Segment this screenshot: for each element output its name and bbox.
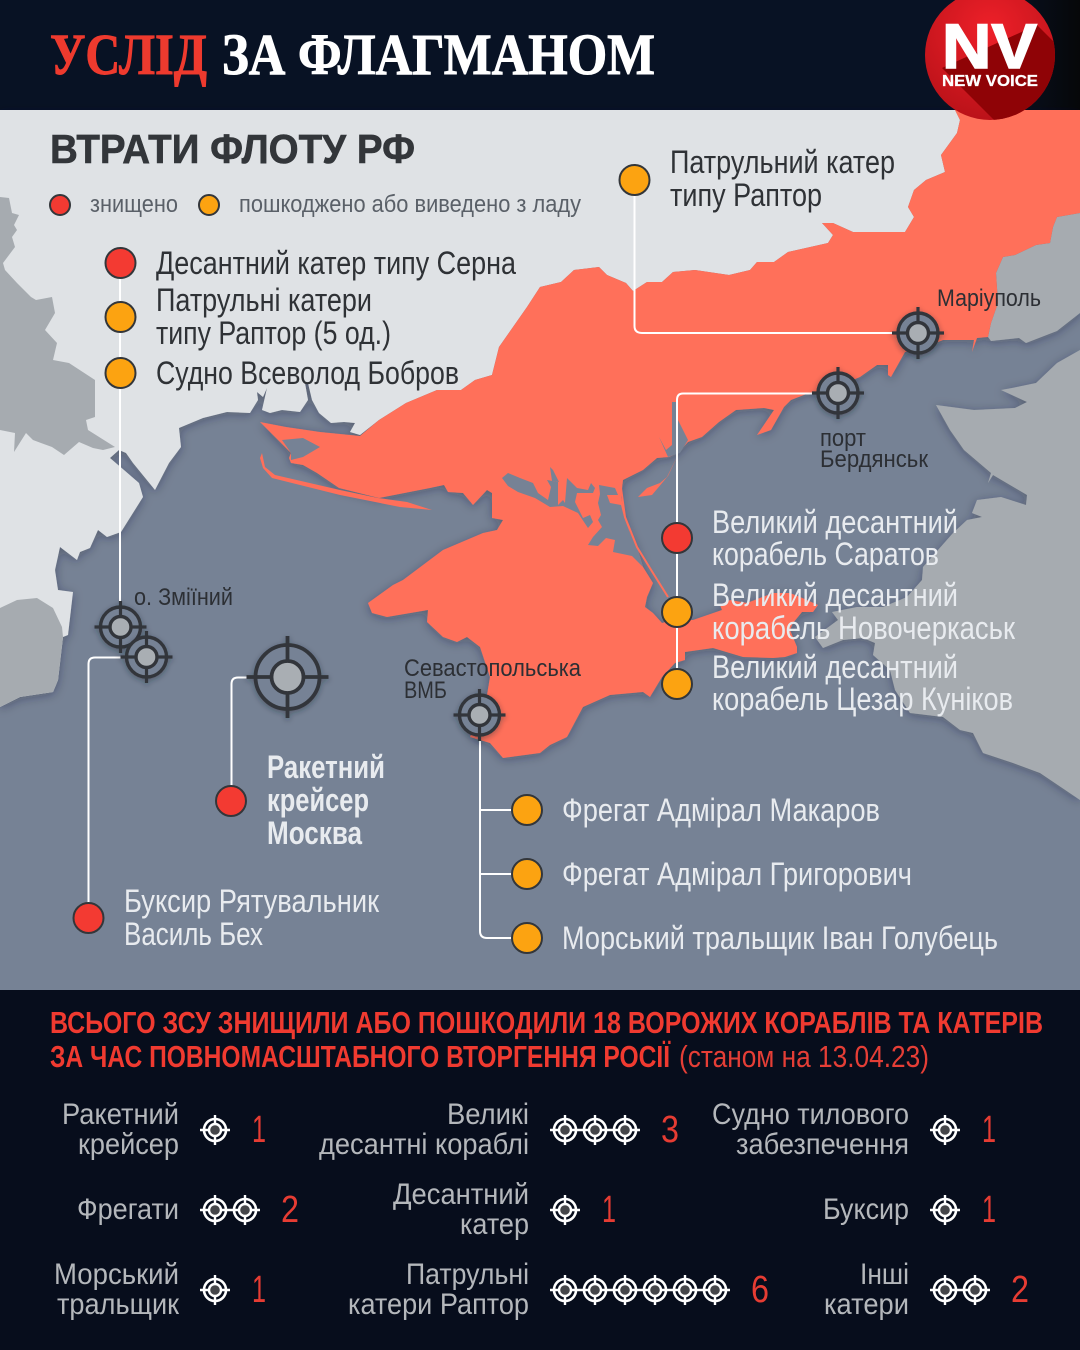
target: cruiser Moskva — [246, 636, 328, 718]
marker: Moskva — [216, 786, 246, 816]
title: УСЛІД — [50, 22, 207, 87]
panel: totals heading — [50, 1005, 1043, 1074]
label: Tsezar Kunikov: корабель Цезар Куніков — [712, 681, 1013, 717]
label: patrol boat — [670, 144, 895, 213]
marker: Saratov — [662, 523, 692, 553]
target: Mariupol — [892, 307, 944, 359]
map: Moldova — [0, 197, 115, 455]
map: occupied territories and Crimea — [260, 110, 1080, 758]
label: tug: Буксир Рятувальник — [124, 883, 380, 919]
map: Romania — [0, 598, 63, 707]
label: Novocherkassk — [712, 577, 1016, 646]
label: minesweeper: Морський тральщик Іван Голубець — [562, 920, 998, 956]
group: tug Vasyl Bekh — [74, 883, 380, 952]
label: Mariupol: Маріуполь — [937, 285, 1041, 312]
legend — [50, 191, 581, 218]
item: Raptor patrol boats — [348, 1258, 769, 1321]
subtitle: fleet losses: ВТРАТИ ФЛОТУ РФ — [50, 126, 415, 172]
label: Novocherkassk: Великий десантний — [712, 577, 958, 613]
label: landing craft: Десантний катер типу Серна — [156, 245, 516, 281]
label: frigate Grigorovich: Фрегат Адмірал Григорович — [562, 856, 912, 892]
target: Snake Island 1 — [94, 601, 146, 653]
label: Raptor boats: типу Раптор (5 од.) — [156, 315, 391, 351]
item: landing craft: Десантний — [393, 1178, 529, 1211]
map: Black Sea region — [0, 110, 1080, 990]
marker: frigate Makarov — [512, 795, 542, 825]
legend: destroyed — [50, 191, 178, 218]
panel: totals grid — [54, 1098, 1029, 1321]
label: Tsezar Kunikov — [712, 649, 1013, 717]
item: frigates — [77, 1189, 299, 1231]
label: Novocherkassk: корабель Новочеркаськ — [712, 610, 1016, 646]
label: Moskva: крейсер — [267, 782, 369, 818]
item: Raptor patrol boats: 6 — [751, 1269, 769, 1311]
item: support vessel — [712, 1098, 996, 1161]
item: other boats: 2 — [1011, 1269, 1029, 1311]
panel: totals heading: (станом на 13.04.23) — [679, 1039, 929, 1074]
label: Raptor boats — [156, 282, 391, 351]
group: Raptor patrol boat — [620, 144, 895, 213]
item: landing craft — [393, 1178, 616, 1241]
group: large landing ships — [662, 504, 1016, 717]
item: landing craft: катер — [460, 1208, 529, 1241]
map: Tendra spit — [260, 453, 432, 510]
item: frigates: Фрегати — [77, 1193, 179, 1226]
legend: destroyed: знищено — [90, 191, 178, 218]
item: large landing ships: десантні кораблі — [319, 1128, 529, 1161]
logo: NV New Voice: NEW VOICE — [942, 73, 1038, 90]
label: Saratov — [712, 504, 958, 572]
item: frigates: 2 — [281, 1189, 299, 1231]
item: minesweeper — [54, 1258, 266, 1321]
label: Sevastopol naval base: ВМБ — [404, 677, 447, 704]
label: tug: Василь Бех — [124, 916, 263, 952]
map: Fedotov spit — [638, 455, 678, 497]
marker: minesweeper — [512, 923, 542, 953]
label: Berdiansk port: порт — [820, 425, 866, 452]
title: ЗА ФЛАГМАНОМ — [222, 22, 655, 87]
item: large landing ships: 3 — [661, 1109, 679, 1151]
label: Sevastopol naval base: Севастопольська — [404, 655, 582, 682]
item: Raptor patrol boats: Патрульні — [406, 1258, 529, 1291]
group: Sevastopol losses — [512, 792, 998, 956]
item: support vessel: 1 — [982, 1109, 996, 1151]
marker: patrol boat — [620, 165, 650, 195]
label: Tsezar Kunikov: Великий десантний — [712, 649, 958, 685]
panel: header bar — [0, 0, 1080, 110]
item: minesweeper: тральщик — [57, 1288, 180, 1321]
target: Sevastopol — [454, 689, 506, 741]
marker: Raptor boats — [106, 302, 136, 332]
item: other boats: Інші — [860, 1258, 909, 1291]
item: large landing ships: Великі — [447, 1098, 529, 1131]
group: cruiser Moskva — [216, 749, 385, 851]
item: minesweeper: Морський — [54, 1258, 179, 1291]
item: support vessel: забезпечення — [736, 1128, 909, 1161]
item: missile cruiser — [62, 1098, 266, 1161]
label: Saratov: корабель Саратов — [712, 536, 939, 572]
label: Raptor boats: Патрульні катери — [156, 282, 372, 318]
map: Russia Krasnodar coast — [815, 350, 1080, 800]
marker: tug — [74, 903, 104, 933]
target: Berdiansk port — [812, 367, 864, 419]
title — [50, 22, 655, 87]
map: Ukraine free territory land — [0, 110, 960, 707]
item: tug — [823, 1189, 996, 1231]
label: Snake Island: о. Зміїний — [134, 584, 233, 611]
label: Sevastopol naval base — [404, 655, 582, 704]
label: Berdiansk port — [820, 425, 928, 473]
logo: NV New Voice: NV — [942, 12, 1037, 82]
map: lagoon near Kherson — [282, 438, 320, 460]
panel: totals heading: ЗА ЧАС ПОВНОМАСШТАБНОГО ВТОРГЕННЯ РОСІЇ — [50, 1039, 671, 1074]
item: tug: Буксир — [823, 1193, 909, 1226]
item: landing craft: 1 — [602, 1189, 616, 1231]
map: Molochnyi liman — [659, 402, 688, 457]
item: other boats — [824, 1258, 1029, 1321]
map: Russia north — [988, 213, 1080, 343]
item: Raptor patrol boats: катери Раптор — [348, 1288, 529, 1321]
logo: NV New Voice — [925, 0, 1055, 120]
label: patrol boat: типу Раптор — [670, 177, 822, 213]
target: Snake Island 2 — [120, 631, 172, 683]
marker: Vsevolod Bobrov — [106, 358, 136, 388]
item: tug: 1 — [982, 1189, 996, 1231]
item: minesweeper: 1 — [252, 1269, 266, 1311]
label: Moskva — [267, 749, 385, 851]
legend: damaged: пошкоджено або виведено з ладу — [239, 191, 581, 218]
item: missile cruiser: Ракетний — [62, 1098, 179, 1131]
item: large landing ships — [319, 1098, 679, 1161]
marker: Tsezar Kunikov — [662, 669, 692, 699]
item: support vessel: Судно тилового — [712, 1098, 909, 1131]
marker: Novocherkassk — [662, 597, 692, 627]
label: Moskva: Ракетний — [267, 749, 385, 785]
label: frigate Makarov: Фрегат Адмірал Макаров — [562, 792, 880, 828]
marker: frigate Grigorovich — [512, 859, 542, 889]
label: tug — [124, 883, 380, 952]
connector lines — [88, 180, 900, 938]
item: missile cruiser: 1 — [252, 1109, 266, 1151]
label: Berdiansk port: Бердянськ — [820, 446, 928, 473]
label: Saratov: Великий десантний — [712, 504, 958, 540]
marker: landing craft — [106, 248, 136, 278]
label: Vsevolod Bobrov: Судно Всеволод Бобров — [156, 355, 459, 391]
item: other boats: катери — [824, 1288, 909, 1321]
map: Syvash lagoons — [502, 467, 643, 567]
item: missile cruiser: крейсер — [78, 1128, 179, 1161]
map: sea — [0, 110, 1080, 990]
label: patrol boat: Патрульний катер — [670, 144, 895, 180]
map: land outline group — [0, 110, 1080, 800]
map: Arabat spit — [621, 488, 668, 597]
group: Snake Island losses — [106, 245, 516, 391]
label: Moskva: Москва — [267, 815, 362, 851]
